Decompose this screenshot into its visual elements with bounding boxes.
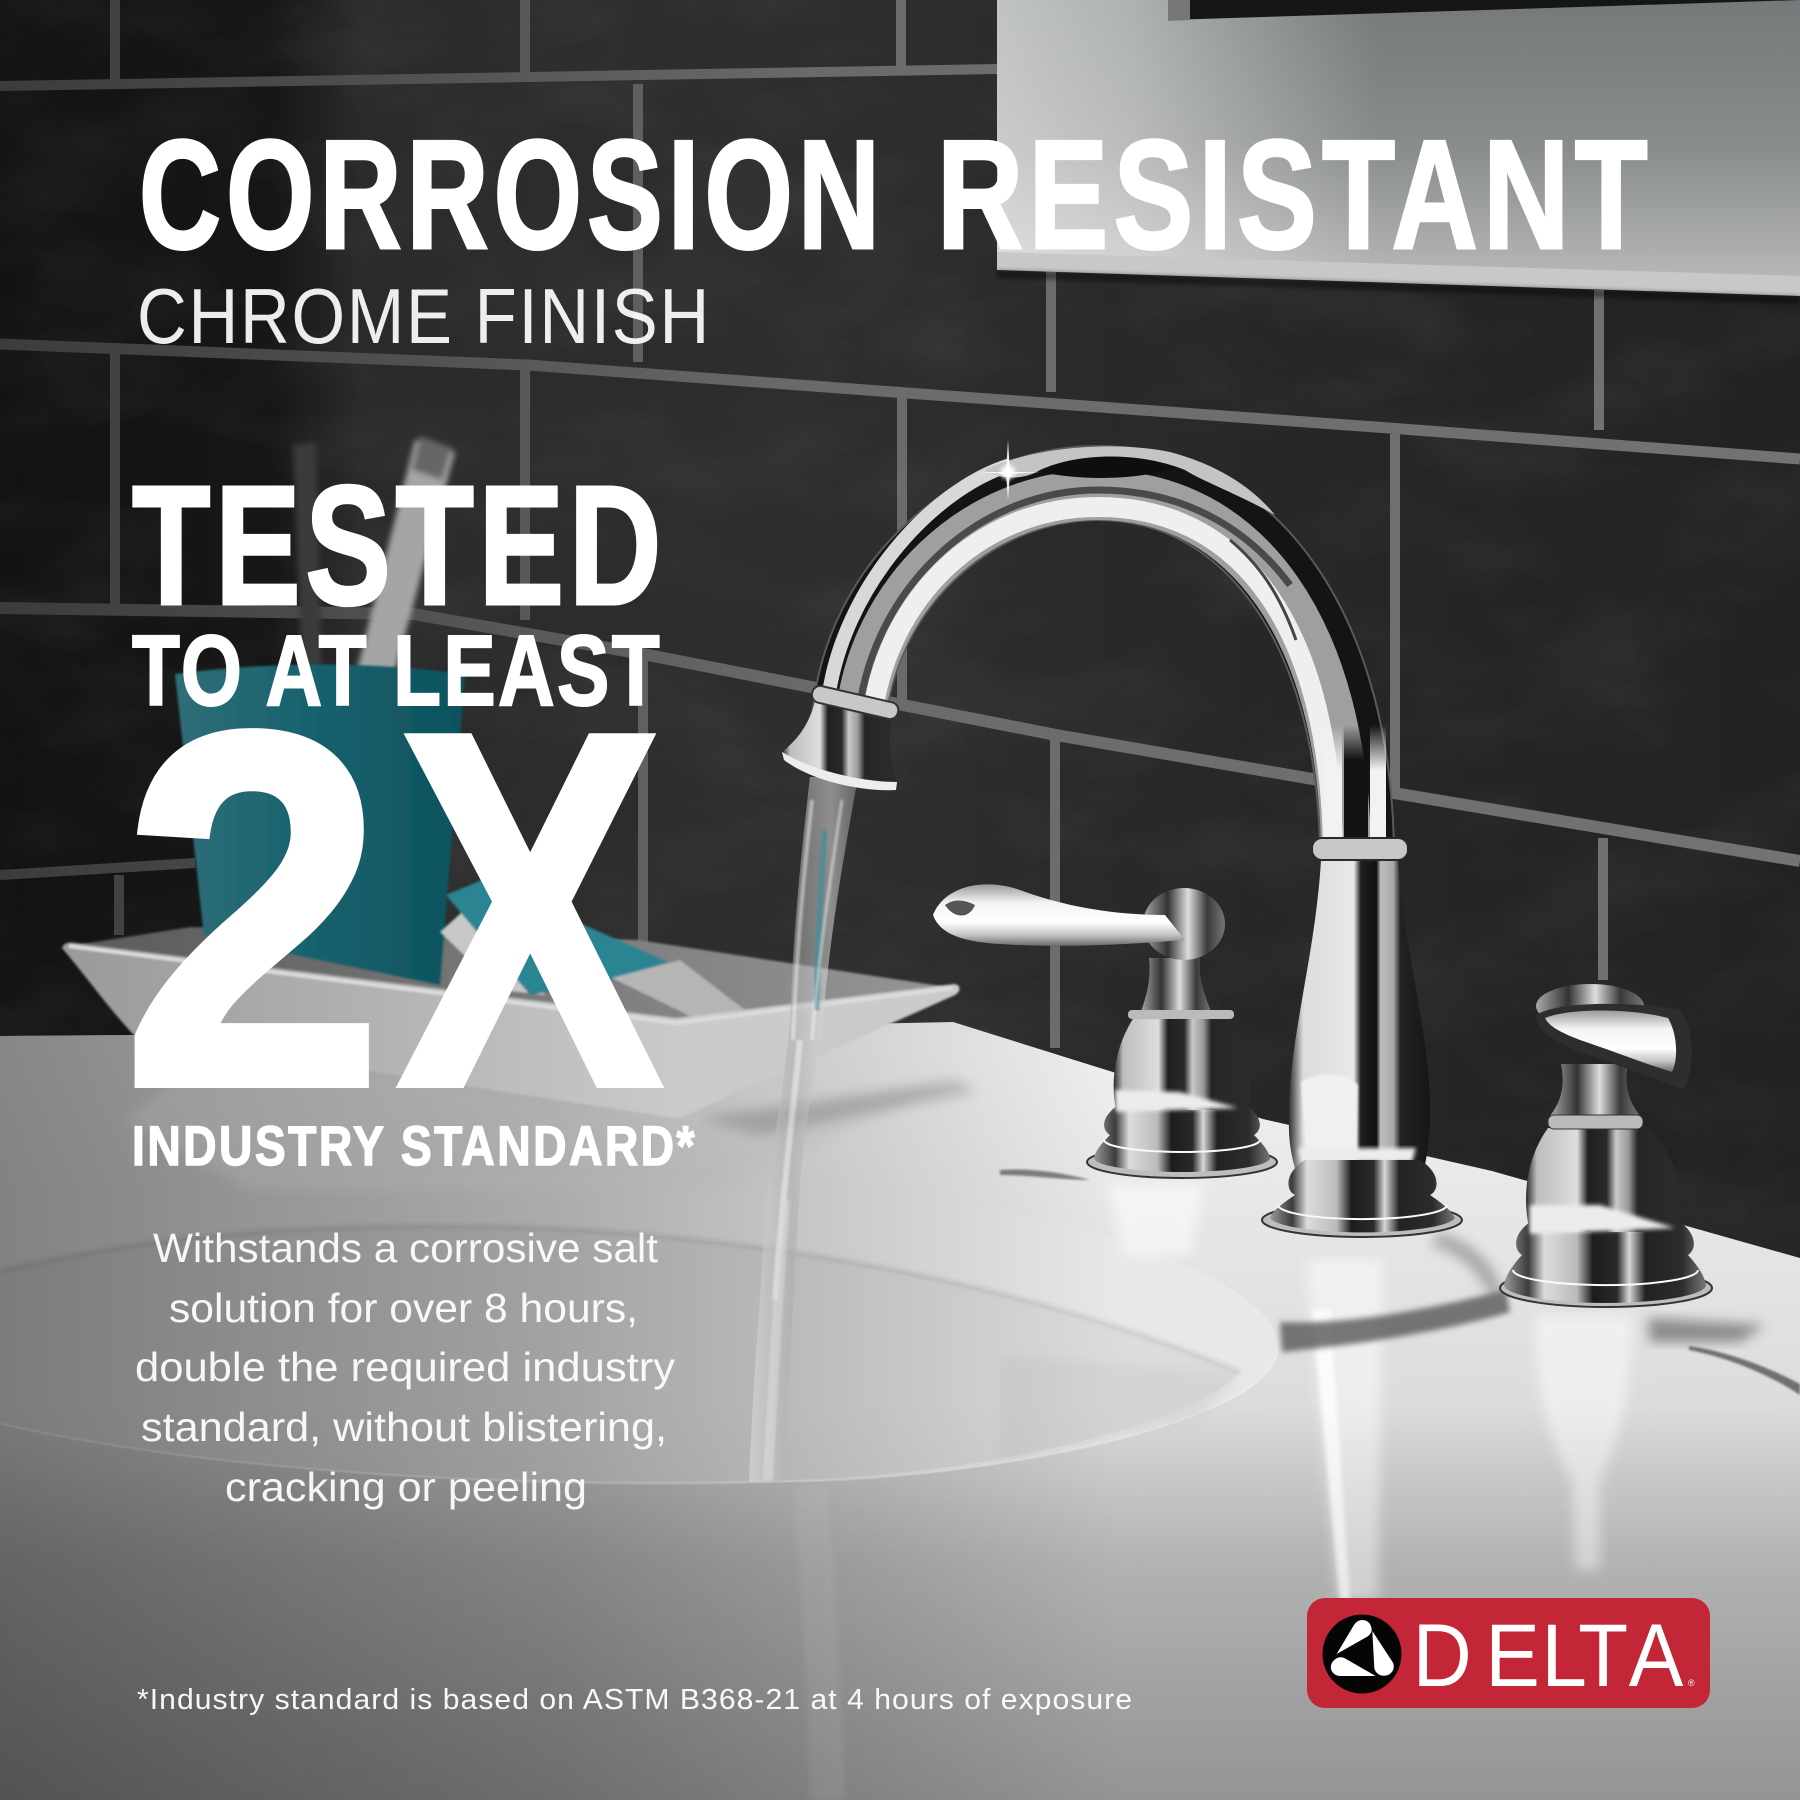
headline: to at least: TO AT LEAST [132,615,662,727]
tray front faces [62,943,960,1118]
left handle [933,884,1277,1178]
big number: 2X: 2 [122,628,384,1191]
faucet center body [1262,838,1462,1237]
logo: Delta [1307,1598,1710,1708]
wordmark: DELTA [1413,1607,1683,1706]
description text [135,1225,676,1510]
subheading: chrome finish: CHROME FINISH [137,272,711,360]
faucet spout [828,446,1378,860]
teal cup [175,664,465,985]
heading: corrosion resistant [139,108,1653,281]
sink basin [0,1165,1278,1484]
left and bottom shading [0,1022,1800,1800]
description text: standard, without blistering, [141,1404,667,1450]
faucet aerator [782,684,900,790]
tiled wall [0,0,1800,1300]
counter top [0,1022,1800,1800]
description text: double the required industry [135,1344,676,1390]
heading: corrosion resistant: CORROSION [139,108,885,281]
right handle [1500,984,1712,1307]
reflections and shadows on counter [1000,1169,1800,1600]
shadow beside tray [700,1080,975,1135]
water stream [749,777,858,1482]
description text: cracking or peeling [225,1464,587,1510]
reflection of tray on counter [125,1045,950,1190]
big number: 2X [122,628,664,1191]
headline: tested: TESTED [132,451,666,641]
description text: solution for over 8 hours, [169,1285,638,1331]
description text: Withstands a corrosive salt [153,1225,659,1271]
label: industry standard: INDUSTRY STANDARD* [132,1114,697,1177]
sparkle on spout [978,440,1040,500]
registered mark: ® [1688,1678,1695,1688]
tray floor [69,927,953,1023]
big number: 2X: X [398,628,664,1191]
toothpaste tubes [440,880,745,1022]
icon: Delta trefoil [1322,1614,1402,1694]
toothbrushes [293,436,455,690]
mirror frame [997,0,1800,304]
footnote: *Industry standard is based on ASTM B368-21 at 4 hours of exposure [137,1684,1133,1716]
water reflection below sink [792,1488,845,1800]
